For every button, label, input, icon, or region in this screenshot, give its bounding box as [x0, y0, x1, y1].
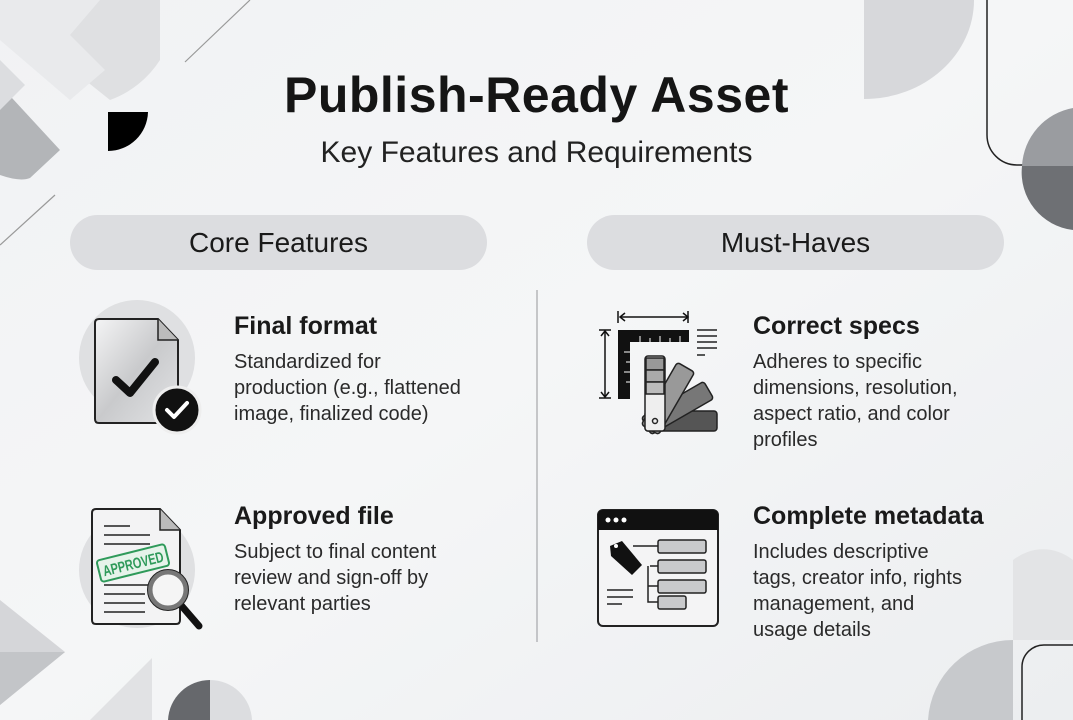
subtitle: Key Features and Requirements — [321, 136, 752, 169]
text: Approved file: relevant parties — [234, 593, 371, 615]
text: Final format: Final format — [234, 312, 377, 340]
text: Complete metadata: management, and — [753, 593, 914, 615]
text: Correct specs: Correct specs — [753, 312, 920, 340]
text: Correct specs — [753, 312, 958, 451]
pill: Must-Haves: Must-Haves — [721, 227, 870, 258]
text: Final format: image, finalized code) — [234, 403, 429, 425]
text: Correct specs: Adheres to specific — [753, 351, 922, 373]
text: Complete metadata: Includes descriptive — [753, 541, 929, 563]
text: Approved file: Subject to final content — [234, 541, 436, 563]
text: Approved file: Approved file — [234, 502, 394, 530]
text: Final format: production (e.g., flattened — [234, 377, 461, 399]
text: Final format: Standardized for — [234, 351, 381, 373]
pill: Must-Haves — [587, 215, 1004, 270]
text: Approved file — [234, 502, 436, 615]
icon: final format document — [79, 300, 201, 434]
text: Complete metadata: Complete metadata — [753, 502, 984, 530]
text: Correct specs: aspect ratio, and color — [753, 403, 950, 425]
title: Publish-Ready Asset — [284, 67, 789, 123]
pill: Core Features — [70, 215, 487, 270]
icon: approved file: APPROVED — [101, 549, 166, 580]
icon: metadata window — [597, 509, 719, 627]
text: Approved file: review and sign-off by — [234, 567, 428, 589]
text: Correct specs: profiles — [753, 429, 817, 451]
text: Correct specs: dimensions, resolution, — [753, 377, 958, 399]
text: Final format — [234, 312, 461, 425]
text: Complete metadata — [753, 502, 984, 641]
pill: Core Features: Core Features — [189, 227, 368, 258]
text: Complete metadata: tags, creator info, rights — [753, 567, 962, 589]
icon: approved file — [79, 508, 202, 630]
icon: correct specs — [599, 311, 718, 434]
text: Complete metadata: usage details — [753, 619, 871, 641]
